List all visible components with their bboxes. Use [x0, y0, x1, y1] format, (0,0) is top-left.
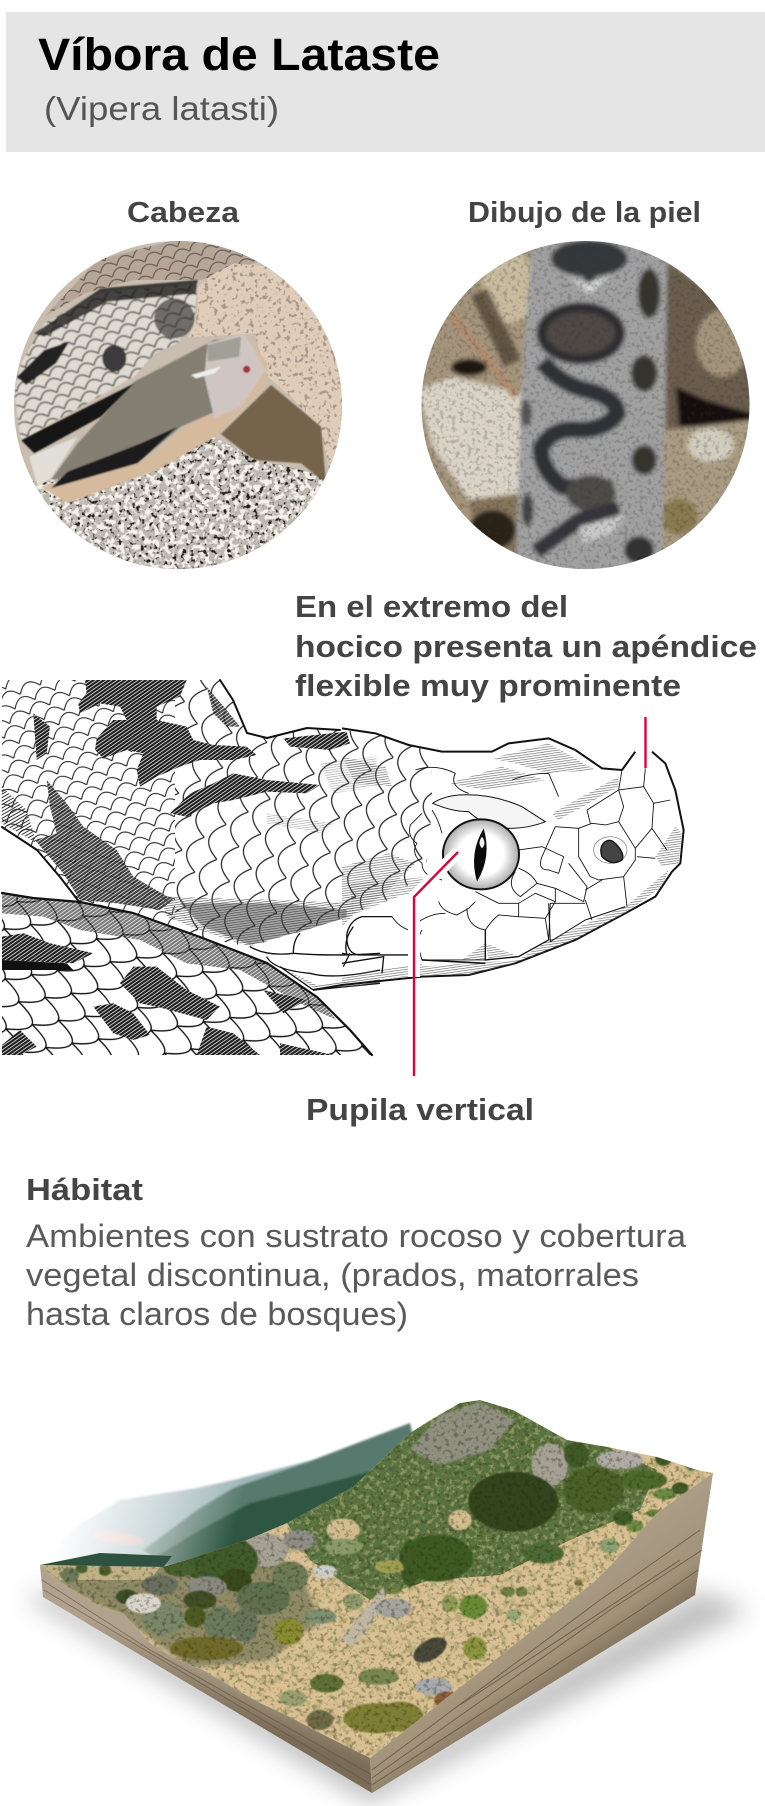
green hillside: [287, 1400, 657, 1600]
callout text line 2: hocico presenta un apéndice: [295, 629, 757, 664]
panel: skin pattern photo circle: [422, 241, 750, 569]
surface texture: [30, 1395, 730, 1765]
gravel speckle: [32, 437, 326, 569]
panel: head photo circle: [14, 241, 342, 569]
head outline: [313, 728, 684, 990]
bushes and rocks, foreground: [61, 1518, 420, 1733]
habitat heading: Hábitat: [26, 1172, 143, 1207]
callout text line 3: flexible muy prominente: [295, 668, 681, 703]
leader line: snout: [644, 717, 647, 768]
neck scales: [2, 680, 432, 945]
rock speckle: [189, 264, 342, 469]
label: skin photo: Dibujo de la piel: [468, 197, 701, 229]
neck dark patches and shading: [2, 680, 433, 947]
habitat text: Ambientes con sustrato rocoso y cobertura: [26, 1218, 686, 1254]
bushes and rocks, upper right: [377, 1434, 698, 1732]
right side face: [370, 1473, 713, 1793]
title: Víbora de Lataste: [38, 29, 440, 80]
head plates: [392, 767, 670, 960]
head shading: [342, 743, 682, 983]
callout text: snout appendage: En el extremo del: [295, 589, 568, 624]
valley floor: [40, 1553, 172, 1568]
label: head photo: Cabeza: [127, 197, 240, 229]
top surface: [30, 1395, 730, 1765]
head: [313, 728, 684, 990]
fur-like texture: [420, 240, 752, 570]
left side face: [40, 1565, 372, 1793]
header band: [6, 12, 765, 152]
scattered dry grass: [30, 1395, 730, 1765]
habitat text: [26, 1218, 686, 1332]
habitat text: hasta claros de bosques): [26, 1296, 408, 1332]
lip plates: [250, 927, 380, 990]
distant mountains, fading into haze: [70, 1422, 414, 1566]
eye: [443, 819, 519, 889]
brow: [433, 795, 545, 828]
habitat text: vegetal discontinua, (prados, matorrales: [26, 1257, 639, 1293]
leader line: pupil: [414, 852, 458, 1076]
body outlines: [2, 680, 372, 1055]
white lip area: [250, 888, 428, 990]
nostril: [594, 837, 627, 863]
callout line: white halo: [414, 852, 458, 977]
landscape block: [28, 1395, 750, 1806]
rocky foreground: [40, 1540, 320, 1668]
scientific name: (Vipera latasti): [44, 90, 279, 127]
label: vertical pupil: Pupila vertical: [306, 1092, 534, 1127]
snake illustration: [0, 670, 684, 1060]
drop shadows: [28, 1590, 750, 1806]
coil scales: [2, 894, 370, 1055]
